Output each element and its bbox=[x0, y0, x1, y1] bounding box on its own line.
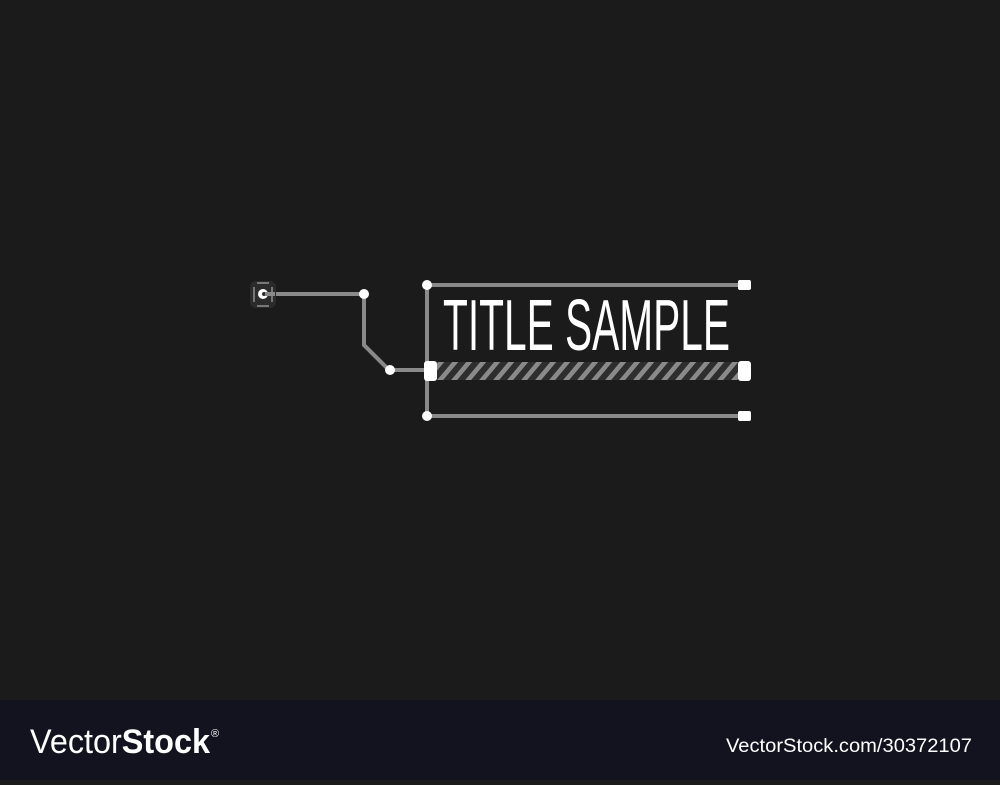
footer: ® bbox=[211, 728, 219, 740]
title: TITLE SAMPLE bbox=[443, 286, 730, 366]
footer: VectorStock.com/30372107 bbox=[726, 736, 972, 757]
footer bbox=[0, 700, 1000, 780]
striped progress bar bbox=[424, 361, 751, 381]
icon: target node bbox=[250, 281, 276, 308]
footer: VectorStock bbox=[30, 723, 210, 761]
title frame bbox=[422, 280, 751, 421]
connector line bbox=[263, 289, 430, 375]
